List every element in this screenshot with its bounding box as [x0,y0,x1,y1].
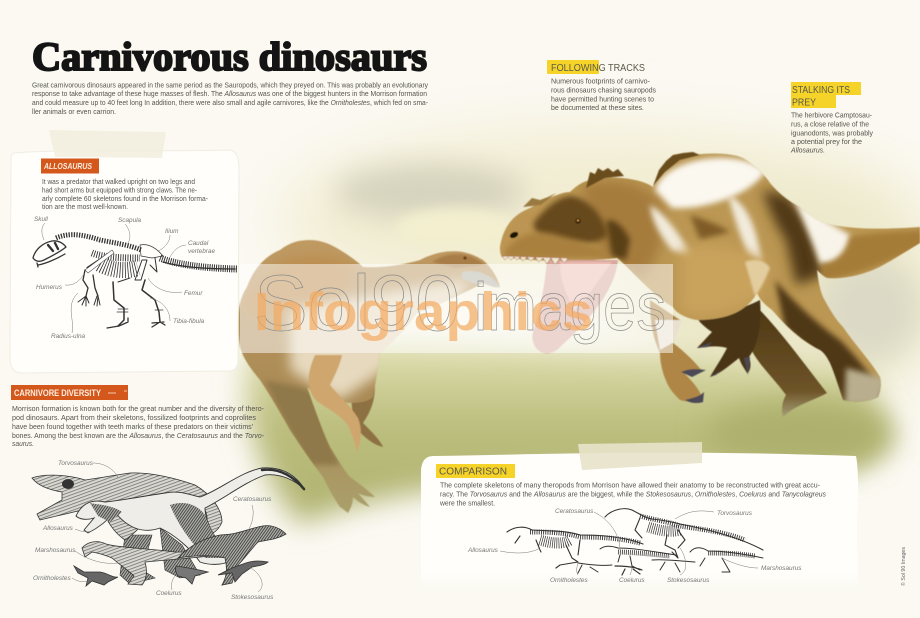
description: Morrison formation is known both for the great number and the diversity of thero- [12,404,264,413]
body: The herbivore Camptosau- [791,110,872,120]
species labels: Marshosaurus [35,547,76,554]
eye [575,218,581,224]
highlight [547,60,599,74]
description [439,480,826,508]
dorsal spikes [586,152,700,188]
Stokesosaurus skeleton [652,560,695,572]
skeleton labels: vertebrae [188,248,215,255]
body: rous dinosaurs chasing sauropods [551,86,656,94]
panel: Allosaurus [10,130,239,373]
outlined logo: Sol90 [254,258,460,347]
intro text: and could measure up to 40 feet long In addition, there were also small and agile carnivores, like the Ornitholestes, which fed on sma- [32,98,428,107]
species labels: Stokesosaurus [667,577,710,584]
intro text [32,80,428,116]
forelimbs [83,270,98,296]
Allosaurus [76,468,305,564]
species labels: Stokesosaurus [231,594,274,601]
body [790,110,873,154]
open mouth [532,260,618,353]
description: have been found together with teeth marks of these predators on their victims' [12,422,253,431]
tape [578,442,702,470]
body: have permitted hunting scenes to [551,94,654,104]
body: rus, a close relative of the [791,120,869,128]
Ornitholestes skeleton [578,563,612,573]
description: The complete skeletons of many theropods from Morrison have allowed their anatomy to be reconstructed with great accu- [440,480,820,490]
Stokesosaurus [218,561,268,582]
panel: comparison [380,442,900,618]
species labels: Torvosaurus [717,510,753,517]
heading [436,464,515,478]
label leader lines [72,463,262,592]
panel card [10,150,239,373]
species labels: Marshosaurus [761,565,802,572]
intro text: response to take advantage of these huge masses of flesh. The Allosaurus was one of the biggest hunters in the Morrison formation [32,89,427,98]
nostril [509,231,519,239]
translucent band [240,264,673,353]
heading [792,85,850,108]
Marshosaurus skeleton [690,548,763,558]
ribs [92,253,140,258]
description: racy. The Torvosaurus and the Allosaurus are the biggest, while the Stokesosaurus, Ornitholestes, Coelurus and Tanycolagreus [440,490,826,498]
title: Carnivorous dinosaurs [32,34,427,79]
heading: PREY [792,98,816,108]
pelvis [140,245,163,258]
heading: FOLLOWING TRACKS [551,63,645,74]
spine [56,235,141,250]
Allosaurus neck and thigh shading [90,503,228,558]
Ornitholestes [74,566,118,586]
description: It was a predator that walked upright on two legs and [42,177,195,186]
species labels: Ornitholestes [33,575,71,582]
body: iguanodonts, was probably [791,128,873,138]
description [12,404,264,448]
far forelimb [697,300,761,377]
heading badge: ALLOSAURUS [43,161,92,171]
front leg [650,300,703,402]
body: Allosaurus. [790,146,825,154]
species labels: Allosaurus [42,525,74,532]
body: be documented at these sites. [551,103,644,112]
watermark [240,258,673,353]
description: were the smallest. [439,498,495,508]
teeth [502,256,568,265]
body [500,154,920,402]
skeleton size comparison [507,509,763,575]
description [42,177,208,211]
illustration: small prey dinosaur (Camptosaurus) [238,240,500,513]
highlight [791,82,861,108]
body [551,76,656,112]
far hind leg [749,305,827,417]
brow crest [523,193,556,207]
foreclaws [681,342,750,403]
Allosaurus skeleton [507,527,643,544]
far limb [350,370,383,447]
outlined logo [254,258,666,347]
body: a potential prey for the [791,137,862,146]
panel card [421,453,858,590]
Coelurus [175,566,208,584]
credit: © Sol 90 Images [900,547,907,586]
species labels [467,508,802,584]
heading: COMPARISON [439,466,507,478]
body shading and highlights [500,158,920,405]
Allosaurus tail shading [262,470,304,489]
body [238,240,500,513]
skeleton labels: Humerus [36,284,63,291]
skeleton labels: Skull [34,216,48,223]
Coelurus skeleton [615,566,642,575]
Ceratosaurus skeleton [600,546,676,555]
illustration: Allosaurus attacking [500,152,920,417]
callout: following tracks [547,60,656,112]
dinosaur line-up [32,468,305,586]
Torvosaurus eye patch [62,479,74,489]
skeleton labels: Radius-ulna [51,333,86,340]
skeleton labels: Femur [184,290,203,297]
species labels: Allosaurus [467,547,499,554]
description: bones. Among the best known are the Allosaurus, the Ceratosaurus and the Torvo- [12,431,264,440]
eye [463,256,467,260]
species labels: Ceratosaurus [555,508,594,515]
heading badge [41,158,99,174]
skeleton labels: Scapula [118,217,142,224]
callout: stalking its prey [790,82,873,154]
near forelimb [309,355,361,452]
intro text: ller animals or even carrion. [32,107,116,116]
tail [160,258,237,269]
species labels [33,460,274,601]
label leader lines [500,511,758,575]
tape [49,130,166,158]
skull [33,241,66,267]
description: pod dinosaurs. Apart from their skeletons, fossilized footprints and coprolites [12,413,256,422]
description: had short arms but equipped with strong claws. The ne- [42,186,197,194]
orange logo: Infographics [254,282,593,342]
species labels: Coelurus [156,590,182,597]
body: Numerous footprints of carnivo- [551,76,650,86]
body shading [240,254,500,465]
species labels: Ornitholestes [550,577,588,584]
description: saurus. [12,439,34,448]
hind limbs [113,280,160,326]
Torvosaurus [32,473,222,540]
Allosaurus skeleton [33,235,237,328]
skeleton labels: Tibia-fibula [173,318,205,325]
Ceratosaurus [178,526,286,585]
skeleton labels: Caudal [188,240,209,247]
intro text: Great carnivorous dinosaurs appeared in the same period as the Sauropods, which they preyed on. This was probably an evolutionary [32,80,428,90]
soft fade below card [380,580,900,618]
heading banner [11,385,128,400]
skeleton labels [34,216,215,340]
skeleton labels: Ilium [165,228,179,235]
outlined logo: images [474,269,666,345]
species labels: Torvosaurus [58,460,94,467]
heading: STALKING ITS [792,85,850,96]
heading banner: CARNIVORE DIVERSITY [14,388,101,398]
species labels: Ceratosaurus [233,496,272,503]
description: arly complete 60 skeletons found in the Morrison forma- [42,194,208,203]
description: tion are the most well-known. [42,202,128,211]
skeleton leader lines [42,223,186,333]
Torvosaurus legs [120,528,200,584]
Torvosaurus skeleton [605,509,763,550]
species labels: Coelurus [619,577,645,584]
Marshosaurus [82,542,218,585]
panel: carnivore diversity [11,385,305,601]
background landscape [245,130,920,525]
